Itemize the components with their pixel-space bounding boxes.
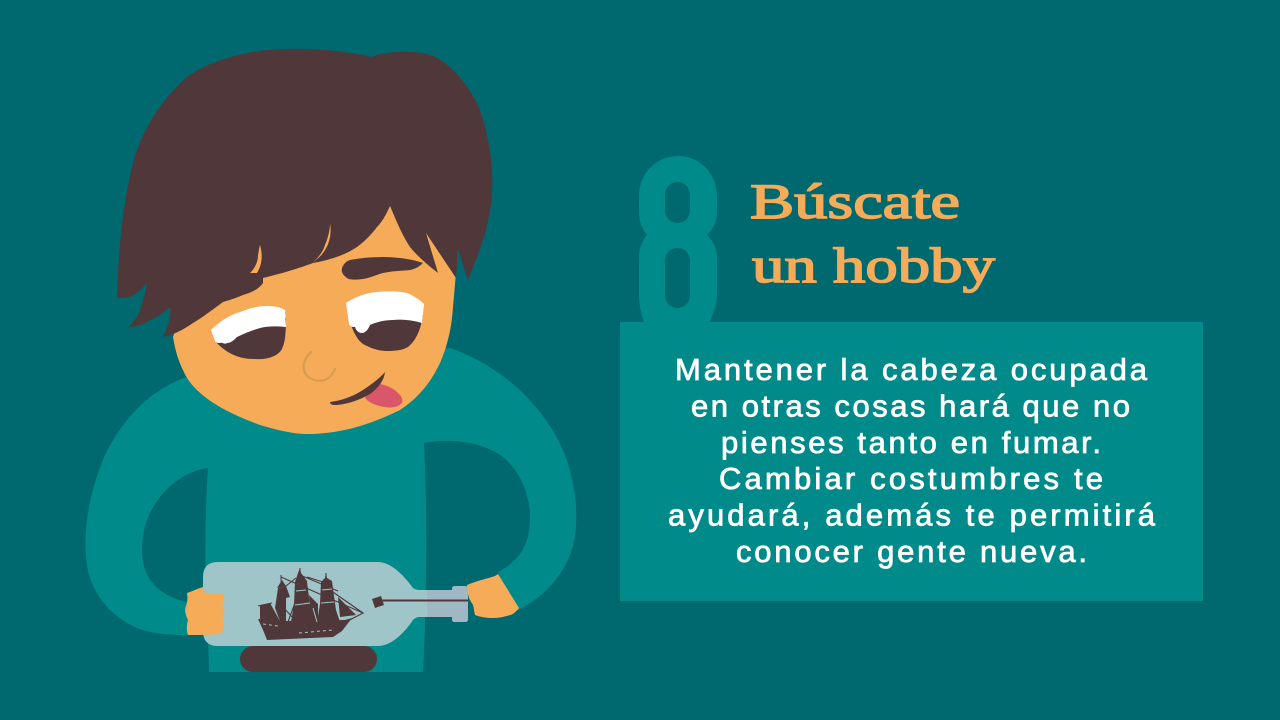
body text: ayudará, además te permitirá xyxy=(668,498,1156,532)
body text: conocer gente nueva. xyxy=(736,534,1087,569)
eyebrow xyxy=(342,257,423,280)
body text: Cambiar costumbres te xyxy=(719,461,1103,496)
stopper and rod xyxy=(372,596,468,608)
hull windows xyxy=(263,624,333,633)
body text: pienses tanto en fumar. xyxy=(721,425,1101,460)
rigging xyxy=(258,568,363,625)
ship in the bottle xyxy=(258,568,363,640)
nose xyxy=(304,352,335,381)
heading: Búscate xyxy=(750,173,960,229)
sweater: arms and torso xyxy=(86,348,576,672)
number 8 xyxy=(639,156,717,325)
dark gap under left arm xyxy=(142,468,208,604)
tongue xyxy=(365,384,402,408)
text panel xyxy=(620,322,1203,601)
hull xyxy=(258,618,352,640)
right eye xyxy=(346,291,424,351)
bottle xyxy=(203,562,468,646)
hair highlights: skin slivers xyxy=(250,223,331,273)
character: boy with ship in a bottle xyxy=(86,49,576,672)
hand: right xyxy=(467,574,519,618)
body text: Mantener la cabeza ocupada xyxy=(675,352,1148,387)
hair xyxy=(117,49,492,337)
bottle stand xyxy=(240,646,377,672)
heading xyxy=(750,173,995,293)
mouth xyxy=(330,372,385,405)
sails xyxy=(260,568,356,622)
body text: en otras cosas hará que no xyxy=(691,388,1130,424)
body text xyxy=(668,352,1156,569)
hand: left xyxy=(185,587,224,635)
left eye xyxy=(211,306,286,359)
bottle neck overlap xyxy=(427,586,468,622)
heading: un hobby xyxy=(752,237,995,293)
head xyxy=(173,150,458,434)
